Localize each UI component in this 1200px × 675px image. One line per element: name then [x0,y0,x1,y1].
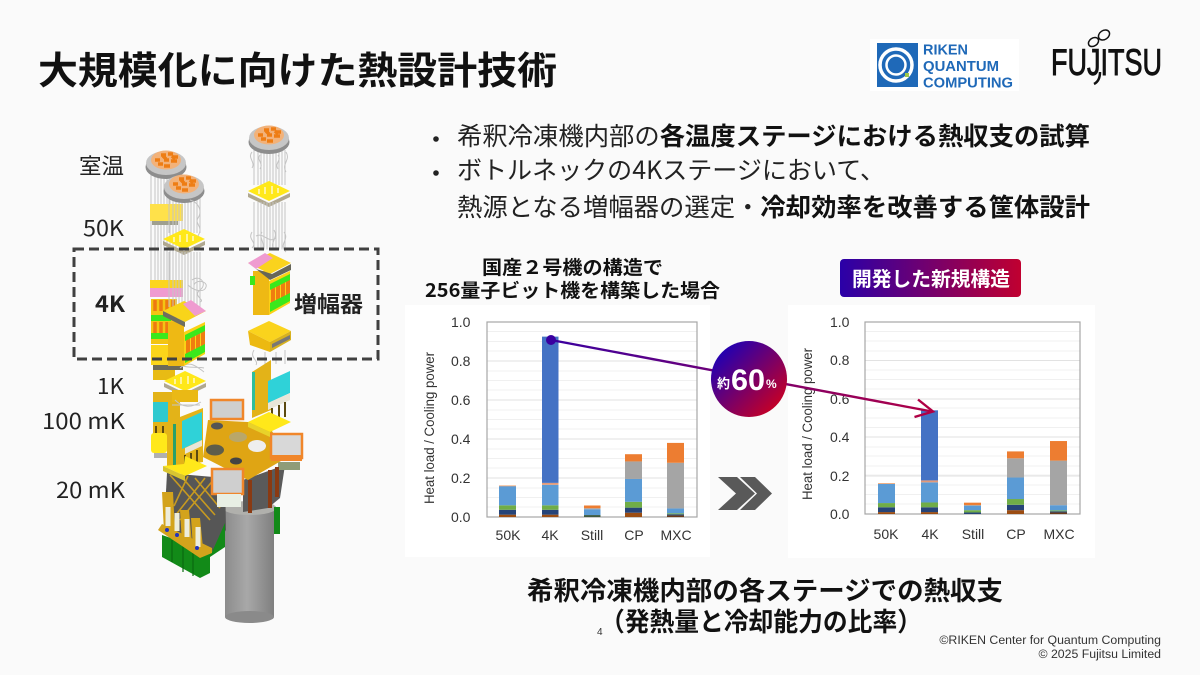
page number: 4 [597,627,603,638]
y axis labels: 0.2 [830,468,850,484]
bullet list [433,117,1090,224]
4K dashed highlight box [74,249,378,359]
y axis labels [830,314,850,522]
label: 1K: 1K [97,369,125,401]
y axis labels: 0.0 [830,506,850,522]
y axis labels: 1.0 [830,314,850,330]
bars: CP [625,454,642,517]
callout: about 60 percent: 約 [717,373,730,392]
chart caption: 希釈冷凍機内部の各ステージでの熱収支 [527,571,1003,608]
badge: new structure [840,259,1021,297]
double chevron arrow [718,477,772,510]
x axis labels: 4K [921,526,939,542]
central cylinder [222,501,276,623]
logo: Fujitsu: FUJITSU [1051,42,1162,83]
logo: Fujitsu [1051,28,1162,84]
bullet 1: 希釈冷凍機内部の各温度ステージにおける熱収支の試算 [457,117,1090,153]
title: 大規模化に向けた熱設計技術 [38,40,557,95]
gold mixing plate [203,420,300,513]
chart caption [527,571,1003,639]
x axis labels: CP [624,527,644,543]
bars: 4K [921,410,938,514]
y axis labels: 0.8 [451,353,471,369]
y axis labels: 1.0 [451,314,471,330]
logo: RIKEN Quantum Computing: RIKEN [923,42,968,58]
x axis labels: 50K [874,526,899,542]
mixing-stage readout boxes [211,400,302,507]
cryostat illustration [146,126,302,623]
label: 50K: 50K [83,211,125,243]
bars: Still [964,503,981,514]
y axis labels: 0.8 [830,352,850,368]
x axis labels: 50K [496,527,521,543]
copyright [939,633,1161,661]
copyright: © 2025 Fujitsu Limited [1038,647,1161,661]
bars: MXC [667,443,684,517]
callout: about 60 percent: % [766,377,777,391]
badge: new structure: 開発した新規構造 [852,263,1010,292]
callout: about 60 percent: 60 [731,364,765,397]
label: 4K: 4K [95,287,126,319]
y axis title: Heat load / Cooling power [422,352,437,504]
x axis labels: MXC [1043,526,1075,542]
heading: left chart [425,253,720,303]
bars: 4K [542,337,558,517]
y axis labels: 0.4 [451,431,471,447]
label: 20 mK: 20 mK [56,473,126,505]
heading: left chart: 国産２号機の構造で [482,253,663,280]
bar chart: existing structure [405,305,710,557]
label: room temperature: 室温 [79,149,124,181]
y axis labels: 0.6 [830,391,850,407]
column C [248,126,291,437]
lower wiring and green blocks [158,473,280,578]
x axis labels [874,526,1075,542]
x axis labels: Still [962,526,984,542]
reduction arrow [546,335,933,417]
logo: RIKEN Quantum Computing [870,39,1019,92]
y axis title: Heat load / Cooling power [800,348,815,500]
x axis labels [496,527,692,543]
bars: 50K [499,486,516,517]
x axis labels: 4K [541,527,559,543]
bars: MXC [1050,441,1067,514]
bullet dots [433,136,439,176]
bars: CP [1007,451,1024,514]
y axis labels [451,314,471,525]
bar chart: new structure [788,305,1095,558]
y axis labels: 0.4 [830,429,850,445]
bars: Still [584,505,600,517]
x axis labels: Still [581,527,603,543]
y axis labels: 0.0 [451,509,471,525]
column B [163,174,207,481]
x axis labels: MXC [660,527,692,543]
y axis labels: 0.6 [451,392,471,408]
x axis labels: CP [1006,526,1026,542]
bullet 2: ボトルネックの4Kステージにおいて、 [457,151,885,187]
bars: 50K [878,483,895,514]
copyright: ©RIKEN Center for Quantum Computing [939,633,1161,647]
logo: RIKEN Quantum Computing: COMPUTING [923,76,1013,92]
y axis labels: 0.2 [451,470,471,486]
label: 100 mK: 100 mK [42,404,126,436]
heading: left chart: 256量子ビット機を構築した場合 [425,276,720,303]
callout: about 60 percent [711,341,787,417]
chart caption: （発熱量と冷却能力の比率） [600,602,922,639]
label: amplifier: 増幅器 [294,287,363,319]
column A [146,150,186,458]
temperature labels [42,149,363,505]
logo: RIKEN Quantum Computing: QUANTUM [923,59,999,75]
bullet 2 continuation: 熱源となる増幅器の選定・冷却効率を改善する筐体設計 [457,188,1090,224]
